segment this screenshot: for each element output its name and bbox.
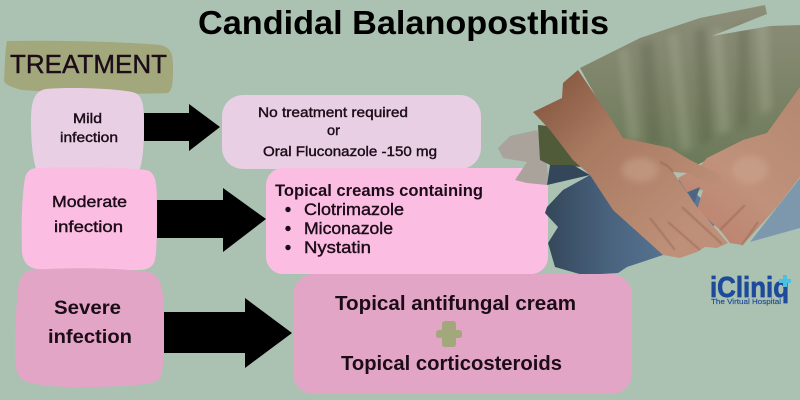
shirt [580,5,800,166]
panel: mild treatment: No treatment required [258,104,408,120]
panel: severe infection: Severe [54,297,121,319]
panel: severe treatment [293,274,632,394]
hand highlights and finger creases [650,162,758,250]
left hand and forearm [533,70,728,258]
panel: mild treatment [222,95,481,169]
panel: moderate infection: Moderate [52,194,127,211]
logo: iCliniq: iCliniq [710,272,789,304]
panel: moderate treatment: Topical creams containing [275,181,483,200]
panel: severe infection [15,268,164,387]
panel: moderate infection: infection [54,219,123,236]
panel: moderate treatment [266,168,548,274]
title: Candidal Balanoposthitis [198,4,609,41]
left leg jeans [545,175,720,275]
panel: moderate treatment: Nystatin [304,238,371,257]
upper jeans strip [547,165,590,185]
shirt folds [618,20,772,150]
panel: severe treatment: Topical corticosteroids [341,353,562,375]
treatment badge [4,41,173,94]
panel: mild infection [31,88,144,172]
jeans gap between hands [688,187,700,204]
panel: severe infection: infection [48,326,132,348]
panel: moderate infection [22,167,157,271]
panel: mild infection: Mild [73,111,102,126]
right hand and forearm [678,87,800,245]
panel: severe treatment: Topical antifungal cream [335,293,576,315]
panel: moderate treatment: Clotrimazole [304,200,404,219]
icon: logo plus [779,275,791,287]
arrow: moderate to treatment [157,188,266,252]
treatment badge: TREATMENT [10,51,167,79]
shirt hem below the arm [538,125,600,168]
panel: moderate treatment: Miconazole [304,219,393,238]
logo: iCliniq: The Virtual Hospital [711,297,781,306]
paint smudge [498,130,548,185]
photo: man with hands over groin [498,5,800,275]
panel: mild treatment: Oral Fluconazole -150 mg [263,143,437,159]
panel: mild treatment: or [327,122,340,138]
right leg jeans [750,178,800,242]
panel: mild infection: infection [60,130,118,145]
icon: plus [436,321,462,347]
arrow: severe to treatment [164,298,292,368]
arrow: mild to treatment [144,104,220,151]
